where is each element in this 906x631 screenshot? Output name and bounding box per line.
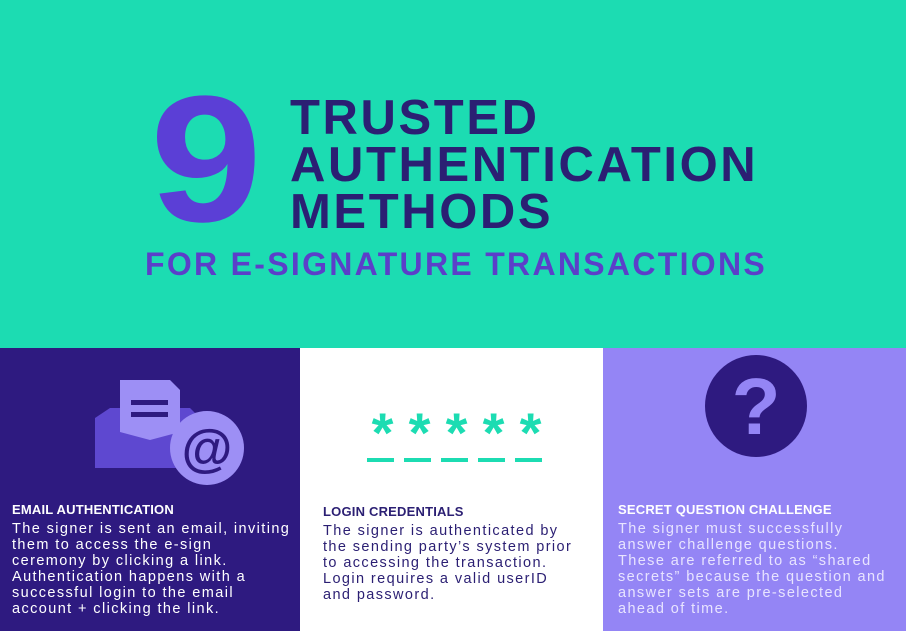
icon: question mark: ?	[732, 362, 780, 451]
icon: asterisks: *	[483, 401, 504, 464]
text	[12, 521, 290, 617]
header	[145, 59, 767, 282]
panel: email authentication	[0, 348, 300, 631]
text: answer sets are pre-selected	[618, 585, 843, 601]
text	[618, 521, 886, 617]
big number 9: 9	[150, 59, 262, 260]
title	[290, 91, 758, 239]
text: ahead of time.	[618, 601, 730, 617]
icon: asterisks: *	[409, 401, 430, 464]
panel: secret question	[603, 348, 906, 631]
icon: asterisks: *	[446, 401, 467, 464]
text: account + clicking the link.	[12, 601, 220, 617]
title: METHODS	[290, 185, 553, 239]
text: Login requires a valid userID	[323, 571, 548, 587]
title: TRUSTED	[290, 91, 540, 145]
icon: asterisks: *	[372, 401, 393, 464]
text: These are referred to as “shared	[618, 553, 872, 569]
text	[323, 523, 572, 603]
text: Authentication happens with a	[12, 569, 246, 585]
icon: question mark	[705, 355, 807, 457]
text: secrets” because the question and	[618, 569, 886, 585]
heading: LOGIN CREDENTIALS	[323, 504, 464, 519]
text: The signer is authenticated by	[323, 523, 558, 539]
icon: envelope with at sign: @	[182, 420, 232, 478]
subtitle: FOR E-SIGNATURE TRANSACTIONS	[145, 246, 767, 282]
panel: login credentials	[300, 348, 603, 631]
icon: asterisks: *	[520, 401, 541, 464]
text: to accessing the transaction.	[323, 555, 547, 571]
text: answer challenge questions.	[618, 537, 839, 553]
text: The signer is sent an email, inviting	[12, 521, 290, 537]
text: ceremony by clicking a link.	[12, 553, 228, 569]
heading: EMAIL AUTHENTICATION	[12, 502, 174, 517]
title: AUTHENTICATION	[290, 138, 758, 192]
heading: SECRET QUESTION CHALLENGE	[618, 502, 832, 517]
icon: envelope with at sign	[95, 380, 244, 485]
text: the sending party’s system prior	[323, 539, 572, 555]
text: successful login to the email	[12, 585, 234, 601]
text: and password.	[323, 587, 436, 603]
text: The signer must successfully	[618, 521, 843, 537]
icon: asterisks	[367, 401, 542, 464]
text: them to access the e-sign	[12, 537, 212, 553]
